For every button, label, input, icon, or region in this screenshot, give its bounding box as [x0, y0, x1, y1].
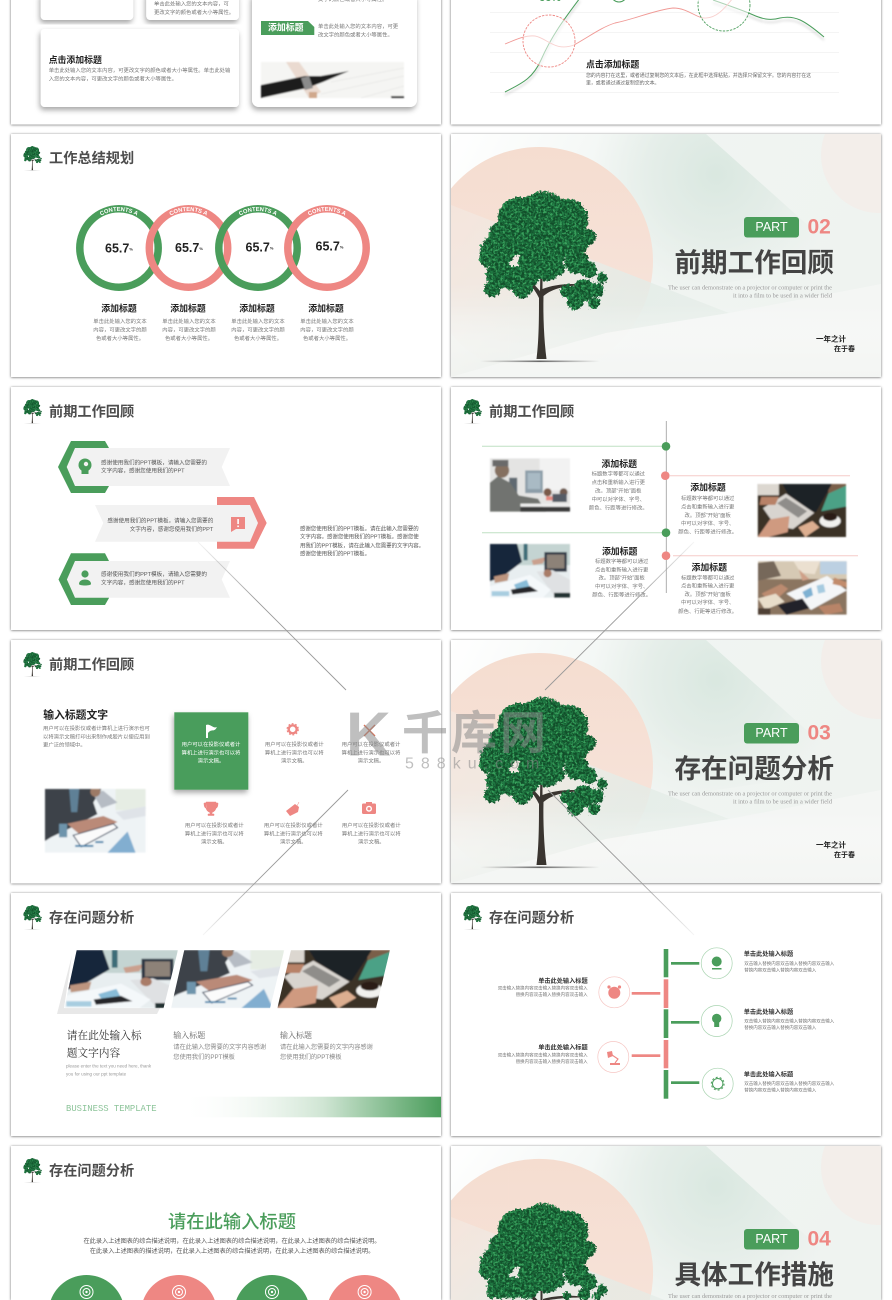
heading: 前期工作回顾 [49, 656, 134, 674]
text block: main prompt: you for using our ppt template [66, 1072, 127, 1076]
panel: problem analysis branch diagram [451, 893, 881, 1136]
text block: main prompt [66, 1029, 152, 1076]
slide frame [451, 893, 881, 1136]
cover subtitle: The user can demonstrate on a projector or computer or print the [668, 1293, 832, 1300]
text block: ring captions: 内容，可更改文字的颜 [162, 326, 216, 334]
timeline item 4 [678, 561, 847, 615]
panel: top right curve chart slide [451, 0, 881, 124]
part badge [744, 217, 799, 238]
text block: side note: 感谢您使用我们的PPT模板。 [300, 550, 370, 558]
card: top middle [146, 0, 239, 20]
branch node: globe [701, 948, 835, 979]
slide frame [451, 387, 881, 630]
part badge: PART [755, 726, 788, 740]
text block: ring captions: 添加标题 [101, 302, 137, 314]
section title: 请在此输入标题 [168, 1211, 296, 1232]
timeline item 4: 改。顶部“开始”面板 [685, 590, 732, 598]
chart: four percentage rings [76, 205, 370, 291]
photo strip [57, 948, 390, 1014]
panel: review timeline [451, 387, 881, 630]
heading: 存在问题分析 [49, 1162, 134, 1180]
heading: 工作总结规划 [49, 150, 134, 167]
hexagon item 1: 文字内容，感谢您使用我们的PPT [101, 467, 185, 475]
icon: tree [23, 399, 42, 424]
card: click to add title: 入您的文本内容，可更改文字的颜色或者大小等属性。 [49, 74, 177, 82]
text block: column 2: 您使用我们的PPT模板 [280, 1053, 342, 1061]
branch node: desk lamp: 单击此处输入标题 [538, 1044, 589, 1052]
text block: intro: 以将演示文稿打印出来制作成胶片以便应用到 [43, 732, 150, 740]
branch node: gear: 双击输入替换内容双击输入替换内容双击输入 [744, 1080, 835, 1087]
timeline item 3: 添加标题 [602, 546, 638, 557]
part number: 02 [808, 216, 831, 238]
hexagon item 1 [58, 441, 230, 493]
text block: intro: 用户可以在投影仪或者计算机上进行演示也可 [43, 724, 151, 732]
heading: 存在问题分析 [489, 910, 574, 926]
timeline item 1: 标题数字等都可以通过 [592, 470, 646, 478]
timeline item 4: 颜色、行距等进行修改。 [678, 607, 737, 615]
text block: ring captions: 单击此处输入您的文本 [300, 317, 354, 325]
feature: gear: 演示文稿。 [281, 757, 308, 765]
branch node: alarm clock [498, 977, 630, 1008]
signature: 一年之计 [816, 840, 846, 850]
cover background [425, 134, 881, 377]
timeline item 2: 添加标题 [690, 481, 726, 492]
panel: work summary plan [9, 132, 443, 380]
panel: top left cards slide [11, 0, 441, 124]
panel: review grid [11, 640, 441, 883]
tree illustration [479, 191, 607, 362]
feature: camera [342, 802, 401, 846]
card: top left [41, 0, 133, 20]
branch node: alarm clock: 替换内容双击输入替换内容双击输入 [516, 991, 588, 998]
card: tag and pen photo: 单击此处输入您的文本内容，可更 [318, 22, 399, 30]
card: tag and pen photo: 改文字的颜色或者大小等属性。 [318, 30, 393, 38]
card: tag and pen photo: 添加标题 [268, 22, 304, 32]
text block: column 2: 请在此输入您需要的文字内容感谢 [280, 1043, 373, 1051]
timeline axis [482, 421, 858, 593]
text block: intro: 输入标题文字 [43, 708, 108, 722]
card: top middle: 更改文字的颜色或者大小等属性。 [154, 8, 234, 16]
chart: four percentage rings: CONTENTS A [308, 207, 346, 216]
feature: trophy: 用户可以在投影仪或者计 [185, 821, 244, 829]
branch node: light bulb [701, 1006, 835, 1036]
signature [816, 840, 855, 859]
icon: tree [23, 652, 42, 677]
text block: side note: 文字内容。感谢您使用我们的PPT模板。感谢您使 [300, 533, 419, 541]
timeline item 4: 添加标题 [692, 562, 727, 573]
timeline item 3: 标题数字等都可以通过 [595, 557, 649, 565]
hexagon item 2: 文字内容，感谢您使用我们的PPT [130, 525, 214, 533]
feature: price tag: 演示文稿。 [280, 838, 307, 846]
text block: ring captions: 色或者大小等属性。 [234, 334, 282, 342]
branch node: light bulb: 双击输入替换内容双击输入替换内容双击输入 [744, 1018, 835, 1024]
text block: intro [43, 708, 151, 749]
hexagon item 2 [95, 497, 267, 549]
cover subtitle [668, 284, 833, 300]
timeline item 2: 点击和重新输入进行更 [681, 502, 735, 510]
timeline item 3: 颜色、行距等进行修改。 [592, 591, 651, 599]
hexagon item 3 [58, 553, 230, 605]
part badge: PART [755, 220, 788, 234]
text block: ring captions: 单击此处输入您的文本 [231, 317, 285, 325]
text block: side note: 感谢您使用我们的PPT模板。请在此输入您需要的 [300, 524, 419, 532]
chart: four percentage rings: 65.7% [175, 241, 203, 255]
hexagon item 3: 感谢使用我们的PPT模板，请输入您需要的 [101, 570, 207, 578]
feature: price tag [264, 802, 323, 846]
part number: 03 [808, 722, 831, 744]
chart: four percentage rings: CONTENTS A [100, 207, 138, 216]
text block: curve caption: 里，或者通过通过复制您的文本。 [586, 80, 659, 86]
feature tile: flag: 演示文稿。 [198, 757, 224, 765]
timeline item 3: 中可以对字体、字号、 [595, 582, 648, 590]
timeline item 1: 添加标题 [602, 458, 637, 469]
branch node: alarm clock: 双击输入替换内容双击输入替换内容双击输入 [498, 984, 588, 992]
text block: ring captions: 添加标题 [308, 302, 344, 314]
watermark [198, 542, 694, 935]
text block: ring captions: 色或者大小等属性。 [303, 334, 351, 342]
chart: four percentage rings: CONTENTS A [170, 207, 207, 216]
feature tile: flag: 算机上进行演示也可以将 [182, 748, 241, 756]
slide frame [11, 387, 441, 630]
card: top middle: 单击此处输入您的文本内容，可 [154, 0, 229, 8]
timeline item 4: 标题数字等都可以通过 [681, 573, 735, 581]
timeline item 1 [490, 458, 648, 512]
chart: four percentage rings: 65.7% [105, 242, 133, 256]
cover title: 前期工作回顾 [674, 248, 834, 278]
part badge [744, 1229, 799, 1250]
signature [816, 334, 855, 353]
feature: gear [265, 724, 324, 765]
section description: 在此录入上述图表的综合描述说明，在此录入上述图表的综合描述说明，在此录入上述图表的综合描述说明。 [84, 1237, 380, 1245]
chart: four percentage rings: CONTENTS A [239, 207, 276, 216]
feature: trophy: 演示文稿。 [201, 838, 228, 846]
heading: 存在问题分析 [49, 910, 134, 926]
feature: camera: 算机上进行演示也可以将 [342, 829, 401, 837]
card: click to add title [41, 29, 239, 107]
business template label: BUSINESS TEMPLATE [66, 1104, 157, 1114]
feature: camera: 用户可以在投影仪或者计 [342, 821, 401, 829]
panel: problem analysis photos [11, 893, 441, 1136]
cover subtitle: it into a film to be used in a wider field [733, 292, 833, 300]
cover subtitle: The user can demonstrate on a projector or computer or print the [668, 284, 832, 292]
chart: four percentage rings: 65.7% [316, 240, 344, 254]
circle card 1 [51, 1275, 122, 1300]
slide frame [11, 134, 441, 377]
text block: column 1 [173, 1030, 266, 1061]
icon: tree [463, 399, 482, 424]
gradient band [180, 1097, 441, 1117]
chart: four percentage rings: 65.7% [246, 240, 274, 254]
text block: ring captions: 单击此处输入您的文本 [93, 317, 147, 325]
cover background [425, 640, 881, 883]
cover subtitle [668, 790, 833, 806]
cover subtitle: The user can demonstrate on a projector or computer or print the [668, 790, 832, 798]
text block: ring captions: 单击此处输入您的文本 [162, 317, 216, 325]
text block: curve caption: 您的内容打在这里，或者通过复制您的文本后，在此框中选择粘贴，并选择只保留文字。您的内容打在这 [586, 72, 811, 79]
watermark: 588ku.com [405, 756, 546, 772]
icon: tree [463, 905, 482, 930]
timeline item 3 [490, 544, 651, 599]
photo: signing document [45, 787, 146, 853]
timeline item 2: 中可以对字体、字号、 [681, 519, 734, 527]
branch node: light bulb: 替换内容双击输入替换内容双击输入 [744, 1024, 817, 1031]
text block: ring captions [93, 302, 354, 342]
feature: trophy [185, 802, 244, 846]
feature: tools: 用户可以在投影仪或者计 [342, 740, 401, 748]
text block: curve caption [586, 58, 811, 86]
branch node: desk lamp [498, 1042, 629, 1072]
panel: cover part 02 [425, 134, 881, 377]
hexagon item 2: 感谢使用我们的PPT模板，请输入您需要的 [107, 517, 214, 525]
text block: ring captions: 内容，可更改文字的颜 [231, 326, 285, 334]
timeline item 1: 中可以对字体、字号、 [592, 495, 645, 503]
timeline item 1: 颜色、行距等进行修改。 [589, 503, 648, 511]
feature: gear: 用户可以在投影仪或者计 [265, 740, 324, 748]
text block: main prompt: 题文字内容 [67, 1046, 120, 1059]
panel: cover part 04 [451, 1146, 881, 1300]
branch node: alarm clock: 单击此处输入标题 [538, 977, 589, 985]
feature: tools: 算机上进行演示也可以将 [342, 748, 401, 756]
part badge [744, 723, 799, 744]
text block: column 1: 您使用我们的PPT模板 [173, 1053, 235, 1061]
part badge: PART [755, 1232, 788, 1246]
tree illustration [479, 697, 607, 868]
card: click to add title: 单击此处输入您的文本内容，可更改文字的颜色或者大小等属性。单击此处输 [49, 66, 231, 74]
circle card 4 [329, 1275, 400, 1300]
icon: tree [23, 1158, 42, 1183]
cover title: 具体工作措施 [674, 1260, 834, 1290]
timeline item 1: 点击和重新输入进行更 [592, 478, 646, 486]
watermark: K [346, 700, 391, 770]
branch node: desk lamp: 替换内容双击输入替换内容双击输入 [516, 1058, 588, 1065]
text block: ring captions: 添加标题 [170, 302, 206, 314]
text block: ring captions: 添加标题 [239, 302, 275, 314]
slide frame [451, 0, 881, 124]
cover title: 存在问题分析 [674, 754, 834, 784]
text block: intro: 更广泛的领域中。 [43, 741, 86, 749]
part number: 04 [808, 1228, 831, 1250]
branch node: globe: 单击此处输入标题 [744, 950, 794, 958]
text block: ring captions: 内容，可更改文字的颜 [93, 326, 147, 334]
signature: 一年之计 [816, 334, 846, 344]
text block: column 1: 请在此输入您需要的文字内容感谢 [173, 1043, 266, 1051]
icon: tree [23, 905, 42, 930]
cover background [451, 1146, 881, 1300]
text block: main prompt: 请在此处输入标 [67, 1029, 142, 1042]
feature tile: flag [174, 712, 248, 790]
circle card 2 [143, 1275, 215, 1300]
text block: ring captions: 内容，可更改文字的颜 [300, 326, 354, 334]
text block: ring captions: 色或者大小等属性。 [96, 334, 144, 342]
cover subtitle: it into a film to be used in a wider field [733, 798, 833, 806]
feature tile: flag: 用户可以在投影仪或者计 [182, 740, 241, 748]
branch node: globe: 替换内容双击输入替换内容双击输入 [744, 966, 817, 974]
timeline item 4: 中可以对字体、字号、 [681, 598, 734, 606]
timeline item 3: 点击和重新输入进行更 [595, 565, 649, 573]
text block: curve caption: 点击添加标题 [586, 58, 639, 69]
slide frame [11, 1146, 441, 1300]
chart: curves [490, 0, 839, 92]
feature: price tag: 算机上进行演示也可以将 [264, 829, 323, 837]
tree illustration [479, 1203, 607, 1300]
hexagon item 1: 感谢使用我们的PPT模板，请输入您需要的 [101, 458, 207, 466]
icon: tree [23, 146, 42, 171]
timeline item 4: 点击和重新输入进行更 [681, 582, 735, 590]
timeline item 2: 颜色、行距等进行修改。 [678, 528, 737, 536]
watermark: 千库网 [402, 707, 549, 759]
card: tag and pen photo [252, 0, 417, 107]
card: click to add title: 点击添加标题 [49, 54, 102, 65]
branch spine [632, 949, 699, 1099]
text block: side note: 用我们的PPT模板，请在此输入您需要的文字内容。 [300, 541, 424, 549]
text block: column 2: 输入标题 [280, 1030, 312, 1040]
branch node: desk lamp: 双击输入替换内容双击输入替换内容双击输入 [498, 1052, 588, 1058]
branch node: gear [702, 1068, 835, 1099]
text block: column 2 [280, 1030, 373, 1061]
section description: 在此录入上述图表的描述说明，在此录入上述图表的综合描述说明，在此录入上述图表的综合描述说明。 [90, 1247, 374, 1255]
heading: 前期工作回顾 [489, 404, 574, 420]
text block: ring captions: 色或者大小等属性。 [165, 334, 213, 342]
text block: column 1: 输入标题 [173, 1030, 205, 1040]
signature: 在于春 [834, 344, 855, 353]
slide frame [11, 640, 441, 883]
feature: tools [342, 725, 401, 765]
branch node: gear: 单击此处输入标题 [744, 1070, 794, 1078]
panel: cover part 03 [425, 640, 881, 883]
circle card 3 [236, 1275, 308, 1300]
text block: side note [300, 524, 424, 558]
hexagon item 3: 文字内容，感谢您使用我们的PPT [101, 578, 185, 586]
heading: 前期工作回顾 [49, 404, 134, 420]
feature: camera: 演示文稿。 [358, 838, 385, 846]
timeline item 1: 改。顶部“开始”面板 [595, 487, 642, 495]
branch node: light bulb: 单击此处输入标题 [744, 1008, 794, 1016]
slide frame [11, 0, 441, 124]
text block: main prompt: please enter the text you need here, thank [66, 1064, 152, 1068]
panel: problem analysis circles [11, 1146, 441, 1300]
timeline item 2: 标题数字等都可以通过 [681, 494, 735, 502]
signature: 在于春 [834, 850, 855, 859]
feature: tools: 演示文稿。 [358, 757, 384, 765]
panel: review hexagon list [11, 387, 441, 630]
timeline item 2: 改。顶部“开始”面板 [685, 511, 732, 519]
timeline item 3: 改。顶部“开始”面板 [599, 574, 646, 582]
slide frame [11, 893, 441, 1136]
feature: gear: 算机上进行演示也可以将 [265, 748, 324, 756]
feature: price tag: 用户可以在投影仪或者计 [264, 821, 323, 829]
branch node: globe: 双击输入替换内容双击输入替换内容双击输入 [744, 960, 835, 967]
branch node: gear: 替换内容双击输入替换内容双击输入 [744, 1086, 817, 1094]
timeline item 2 [678, 481, 846, 537]
feature: trophy: 算机上进行演示也可以将 [185, 829, 244, 837]
section description [84, 1237, 380, 1255]
